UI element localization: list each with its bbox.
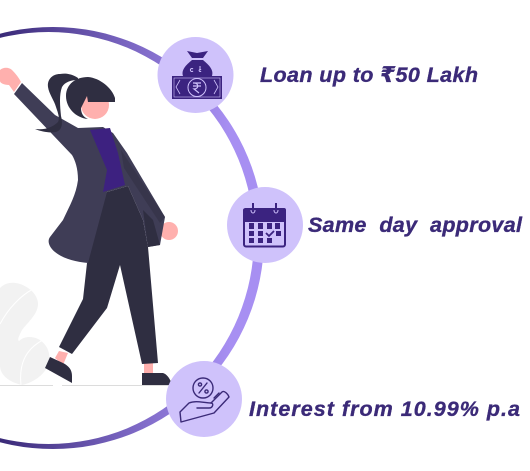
illustration: woman — [0, 68, 178, 385]
shoes — [45, 357, 172, 385]
trousers — [59, 186, 158, 364]
badge: calendar — [227, 187, 303, 263]
text: interest: Interest from 10.99% p.a — [249, 397, 520, 421]
shirt — [90, 128, 125, 192]
coat fold — [121, 150, 165, 223]
text: loan: Loan up to ₹50 Lakh — [260, 63, 478, 87]
badge: interest — [166, 361, 242, 437]
coat — [14, 83, 165, 263]
illustration: ground line — [0, 384, 184, 386]
icon: money bag and rupee note — [172, 51, 222, 99]
icon: percent in hand — [180, 378, 229, 422]
icon: calendar — [243, 203, 286, 246]
ponytail — [35, 74, 78, 132]
text: approval: Same day approval — [308, 213, 523, 237]
illustration: plant — [0, 283, 49, 385]
ankles — [55, 351, 153, 374]
coat flap — [143, 210, 160, 247]
raised hand — [0, 68, 21, 92]
lowered hand — [160, 222, 178, 240]
ring arc — [0, 27, 264, 449]
face — [81, 91, 109, 119]
hair — [66, 77, 115, 119]
badge: money bag — [158, 37, 234, 113]
